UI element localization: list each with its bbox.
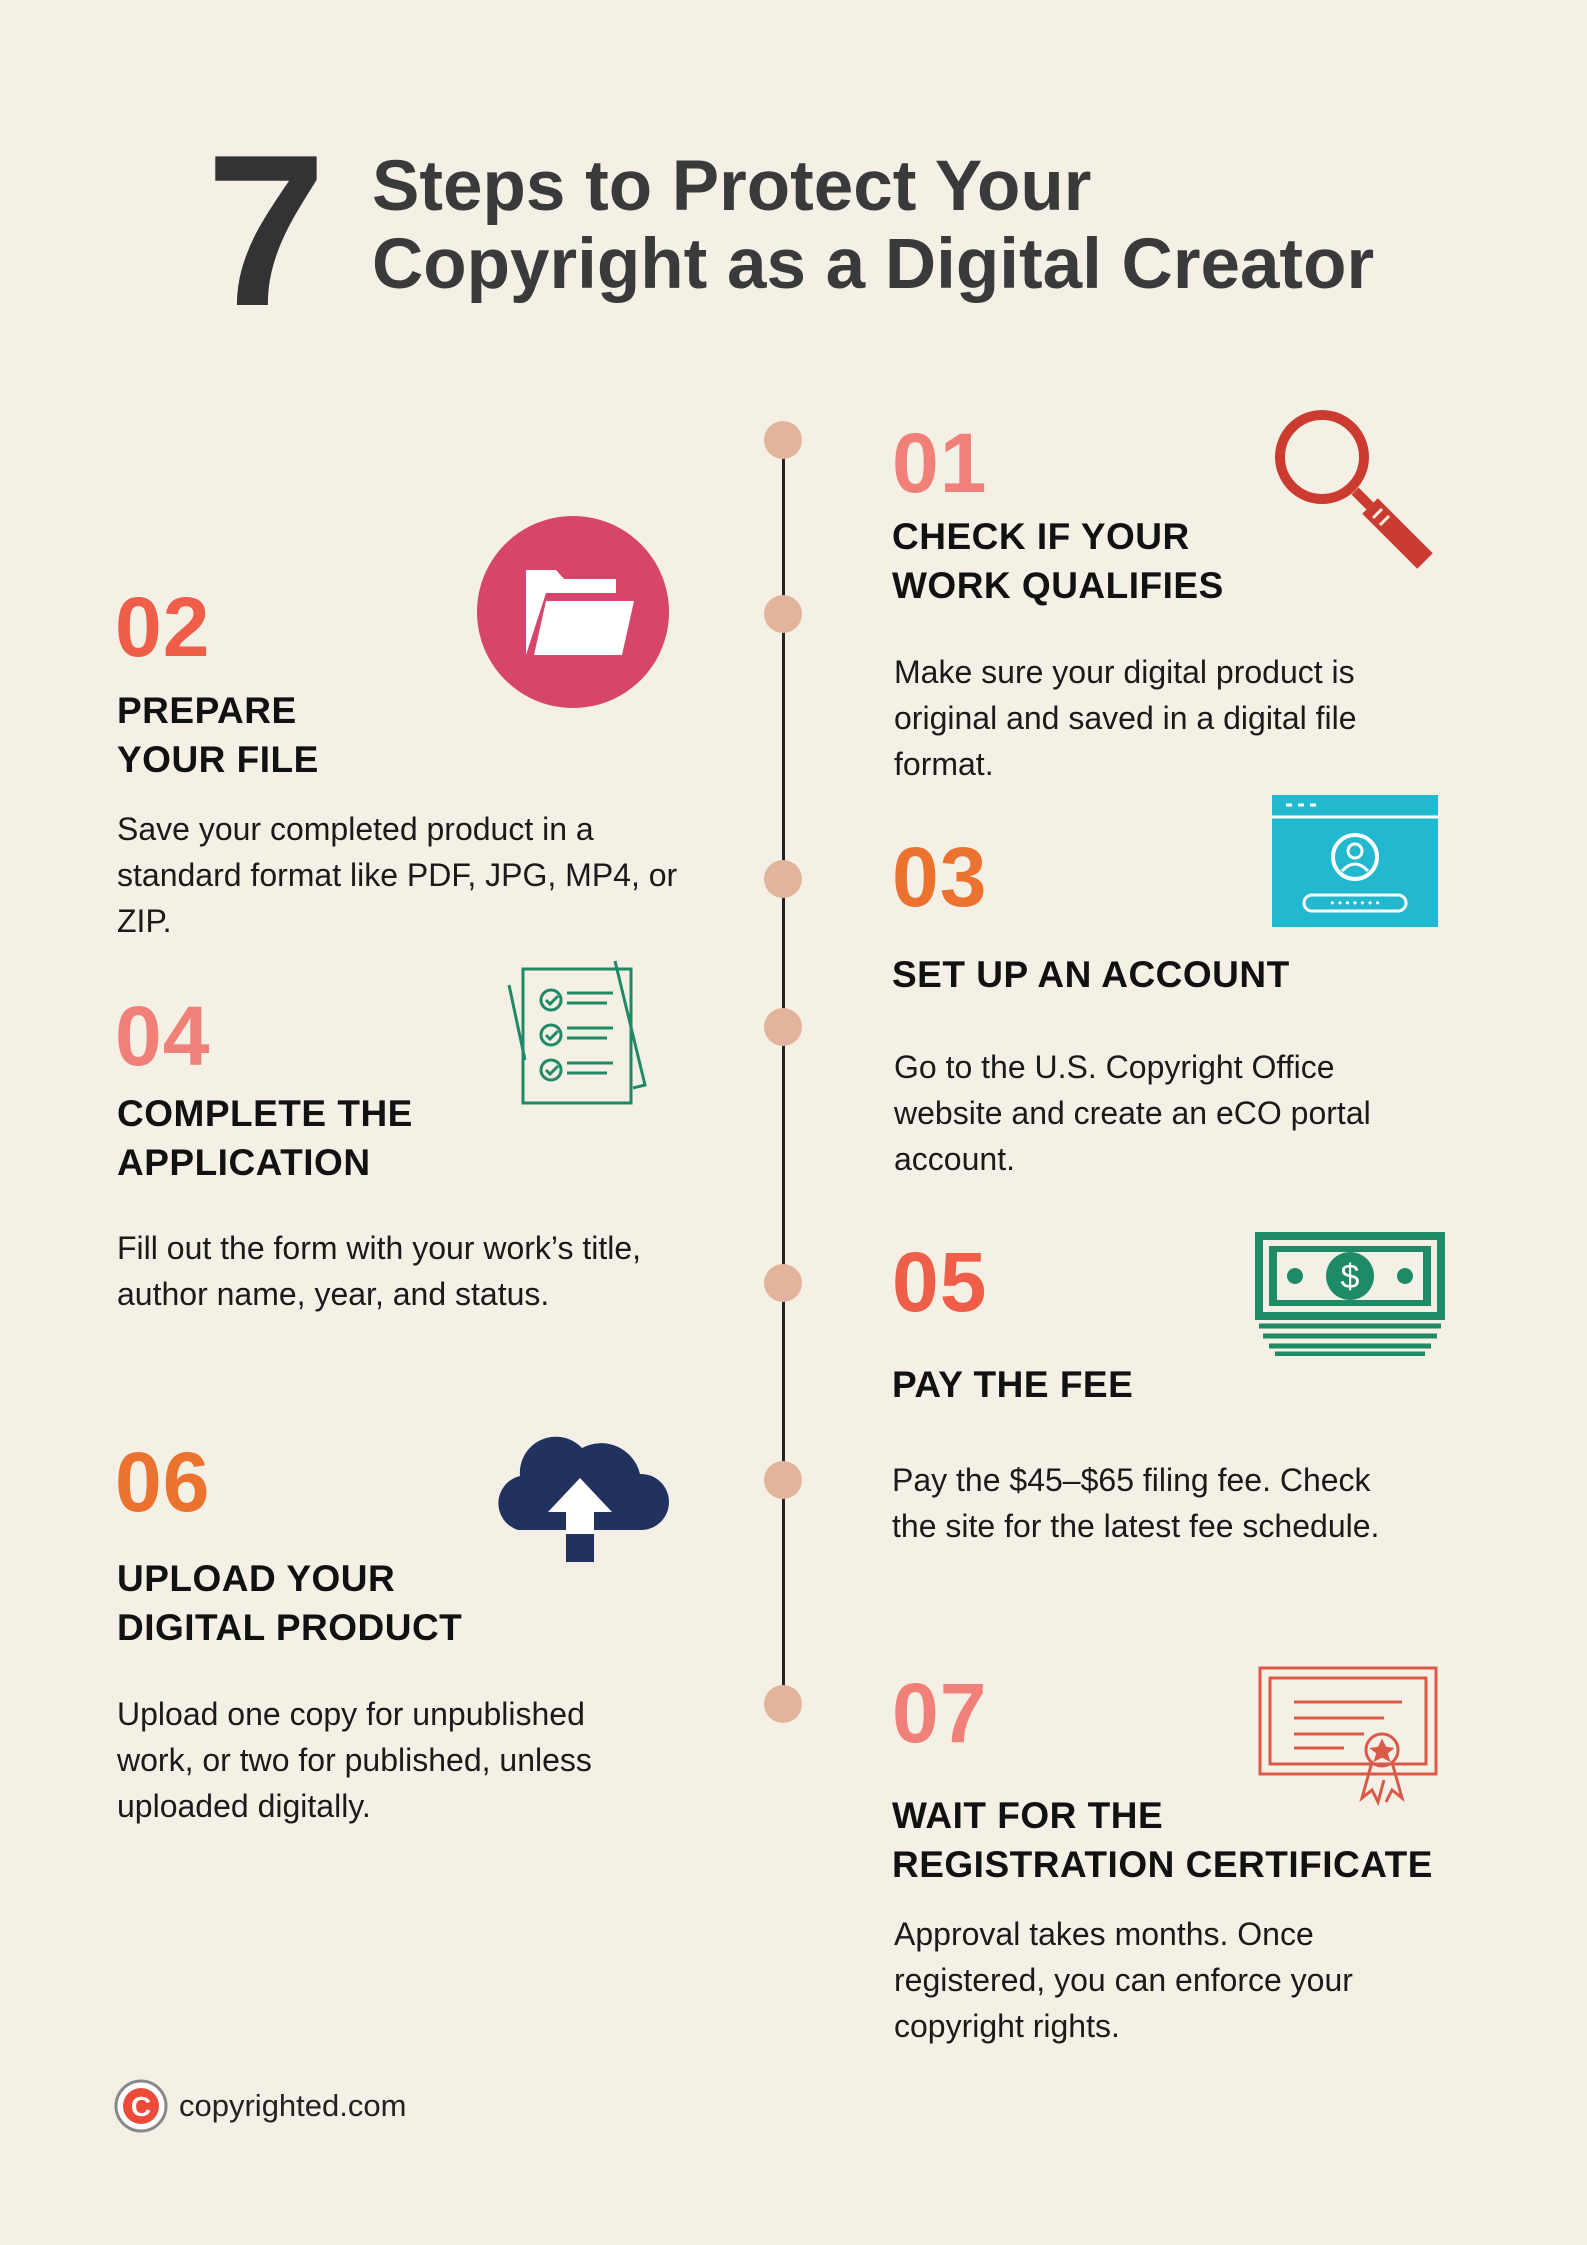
step 07 body: registered, you can enforce your (894, 1962, 1353, 1998)
title number 7: 7 (206, 109, 326, 351)
footer logo (114, 2080, 406, 2132)
icon: magnifier (1275, 410, 1433, 569)
step 06 heading: UPLOAD YOUR (117, 1558, 395, 1599)
step 05 number: 05 (892, 1235, 987, 1329)
step 04 body (117, 1230, 641, 1312)
step 07 body: Approval takes months. Once (894, 1916, 1314, 1952)
step 01 body: format. (894, 746, 994, 782)
step 02 body (117, 811, 677, 939)
step 03 number: 03 (892, 830, 987, 924)
footer text: copyrighted.com (179, 2088, 406, 2123)
icon: certificate (1258, 1666, 1438, 1806)
step 06 number: 06 (115, 1435, 210, 1529)
step 01 number: 01 (892, 416, 987, 510)
icon: browser account (1272, 795, 1438, 927)
step 06 body (117, 1696, 592, 1824)
icon: money (1255, 1232, 1445, 1356)
step 02 heading: YOUR FILE (117, 739, 319, 780)
step 01 body (894, 654, 1357, 782)
step 06 body: uploaded digitally. (117, 1788, 371, 1824)
title: Steps to Protect Your (372, 147, 1091, 226)
step 01 heading (892, 516, 1224, 606)
step 02 body: Save your completed product in a (117, 811, 594, 847)
step 04 heading: COMPLETE THE (117, 1093, 413, 1134)
step 04 body: author name, year, and status. (117, 1276, 549, 1312)
icon: copyright (114, 2080, 168, 2132)
step 01 heading: WORK QUALIFIES (892, 565, 1224, 606)
timeline (782, 440, 785, 1705)
step 02 heading (117, 690, 319, 780)
step 02 body: ZIP. (117, 903, 172, 939)
step 06 body: Upload one copy for unpublished (117, 1696, 585, 1732)
step 06 heading (117, 1558, 462, 1648)
step 02 body: standard format like PDF, JPG, MP4, or (117, 857, 677, 893)
step 04 number: 04 (115, 989, 210, 1083)
icon: checklist (508, 960, 647, 1104)
step 07 heading: REGISTRATION CERTIFICATE (892, 1844, 1433, 1885)
step 05 body (892, 1462, 1379, 1544)
step 01 body: Make sure your digital product is (894, 654, 1355, 690)
step 07 number: 07 (892, 1666, 987, 1760)
icon: cloud upload (498, 1436, 669, 1562)
step 07 body: copyright rights. (894, 2008, 1120, 2044)
step 03 heading: SET UP AN ACCOUNT (892, 954, 1290, 995)
step 06 body: work, or two for published, unless (117, 1742, 592, 1778)
step 04 body: Fill out the form with your work’s title, (117, 1230, 641, 1266)
title (372, 147, 1374, 304)
icon: browser account: • • • • • • • (1330, 896, 1380, 910)
step 05 body: Pay the $45–$65 filing fee. Check (892, 1462, 1371, 1498)
step 05 body: the site for the latest fee schedule. (892, 1508, 1379, 1544)
step 03 body: website and create an eCO portal (894, 1095, 1371, 1131)
step 07 body (894, 1916, 1353, 2044)
step 02 heading: PREPARE (117, 690, 297, 731)
step 01 heading: CHECK IF YOUR (892, 516, 1190, 557)
step 03 body: Go to the U.S. Copyright Office (894, 1049, 1334, 1085)
step 03 body (894, 1049, 1371, 1177)
icon: money: $ (1341, 1258, 1360, 1296)
step 06 heading: DIGITAL PRODUCT (117, 1607, 462, 1648)
step 04 heading (117, 1093, 413, 1183)
step 07 heading (892, 1795, 1433, 1885)
title: Copyright as a Digital Creator (372, 225, 1374, 304)
step 07 heading: WAIT FOR THE (892, 1795, 1163, 1836)
icon: copyright: C (131, 2091, 151, 2122)
step 04 heading: APPLICATION (117, 1142, 371, 1183)
icon: folder (477, 516, 669, 708)
step 02 number: 02 (115, 580, 210, 674)
step 01 body: original and saved in a digital file (894, 700, 1357, 736)
step 03 body: account. (894, 1141, 1015, 1177)
step 05 heading: PAY THE FEE (892, 1364, 1133, 1405)
